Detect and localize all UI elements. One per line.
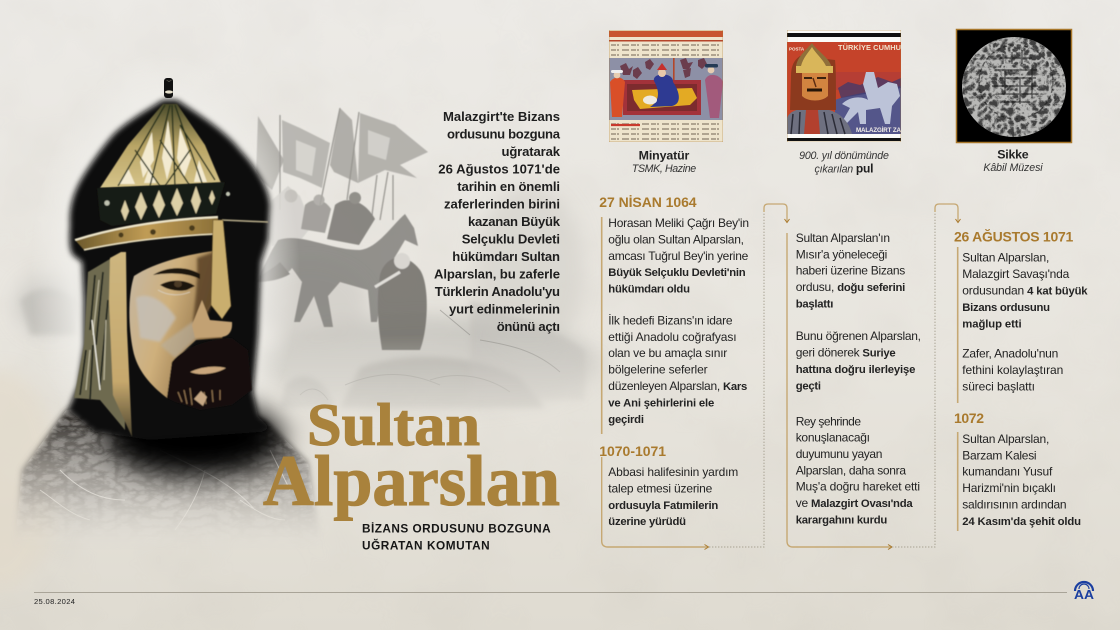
- dark helmet and hair silhouette: [68, 100, 270, 440]
- caption: coin: Sikke: [997, 148, 1029, 162]
- scene: riders and horse: [256, 186, 427, 350]
- neck shadow: [107, 400, 283, 476]
- caption: coin: Kâbil Müzesi: [983, 162, 1043, 174]
- text: 1072 events: Barzam Kalesi: [962, 448, 1037, 462]
- timeline column 2: hattına doğru ilerleyişe: [796, 364, 915, 376]
- title: Sultan: [307, 392, 480, 458]
- text: 1064 events: olan ve bu amaçla sınır: [608, 346, 727, 360]
- text: 1072 events: 24 Kasım'da şehit oldu: [962, 516, 1081, 528]
- text: 1070-1071 events: talep etmesi üzerine: [608, 481, 713, 495]
- portrait halo: [30, 50, 300, 490]
- helmet gold dome: [100, 104, 221, 188]
- timeline connectors: [602, 204, 960, 550]
- text: 1064 events: İlk hedefi Bizans'ın idare: [608, 313, 733, 327]
- helmet finial: [164, 78, 173, 98]
- heading: 27 Nisan 1064: 27 NİSAN 1064: [599, 194, 697, 210]
- battle scene illustration: [15, 108, 600, 415]
- intro paragraph: Selçuklu Devleti: [462, 231, 560, 246]
- caption: stamp: 900. yıl dönümünde: [799, 150, 889, 162]
- text: battle of Malazgirt: Bizans ordusunu: [962, 302, 1050, 314]
- stamp: riders: [842, 72, 900, 124]
- intro paragraph: önünü açtı: [497, 319, 560, 334]
- caption: stamp: [799, 150, 889, 176]
- image captions: [632, 148, 1043, 176]
- timeline column 2: Mısır'a yöneleceği: [796, 247, 887, 261]
- timeline column 2: Bunu öğrenen Alparslan,: [796, 329, 921, 343]
- timeline column 2: Sultan Alparslan'ın: [796, 231, 890, 245]
- caption: miniature: Minyatür: [639, 148, 690, 162]
- caption: coin: [983, 148, 1043, 174]
- text: 1064 events: bölgelerine seferler: [608, 363, 708, 377]
- text: battle of Malazgirt: Malazgirt Savaşı'nda: [962, 267, 1070, 281]
- text: battle of Malazgirt: mağlup etti: [962, 318, 1022, 330]
- text: 1064 events: amcası Tuğrul Bey'in yerine: [608, 249, 749, 263]
- text: battle of Malazgirt: Sultan Alparslan,: [962, 251, 1049, 265]
- text: 1064 events: ettiği Anadolu coğrafyası: [608, 330, 737, 344]
- scene: fallen soldiers: [20, 288, 585, 408]
- text: 1072 events: saldırısının ardından: [962, 497, 1067, 511]
- timeline column 2: konuşlanacağı: [796, 431, 870, 445]
- timeline column 1: [599, 194, 749, 528]
- timeline column 2: karargahını kurdu: [796, 514, 887, 526]
- helmet gold band: [75, 217, 268, 250]
- timeline column 2: başlattı: [796, 298, 833, 310]
- text: 1064 events: hükümdarı oldu: [608, 283, 690, 295]
- caption: miniature: TSMK, Hazine: [632, 163, 696, 175]
- image: stamp: MALAZGİRT ZA: [856, 127, 902, 134]
- text: battle of Malazgirt: Zafer, Anadolu'nun: [962, 347, 1058, 361]
- eyebrow and eye: [153, 268, 200, 295]
- caption: miniature: [632, 148, 696, 175]
- text: battle of Malazgirt: süreci başlattı: [962, 379, 1035, 393]
- logo: AA: AA: [1074, 588, 1094, 602]
- timeline column 2: duyumunu yayan: [796, 447, 882, 461]
- subtitle: UĞRATAN KOMUTAN: [362, 538, 490, 552]
- timeline column 2: [796, 231, 921, 526]
- intro paragraph: ordusunu bozguna: [447, 127, 561, 142]
- text: 1070-1071 events: [608, 465, 738, 528]
- caption: stamp: çıkarılan pul: [814, 162, 874, 176]
- text: 1064 events: ve Ani şehirlerini ele: [608, 397, 714, 409]
- image: stamp: POSTA: [789, 46, 805, 52]
- text: 1072 events: [962, 432, 1081, 528]
- intro paragraph: [434, 109, 561, 334]
- timeline column 2: geri dönerek Suriye: [796, 345, 896, 359]
- image: stamp: [786, 30, 902, 142]
- text: battle of Malazgirt: [962, 251, 1088, 393]
- left cheek guard: [74, 252, 132, 437]
- text: 1064 events: Büyük Selçuklu Devleti'nin: [608, 267, 746, 279]
- heading: 1070-1071: 1070-1071: [599, 443, 666, 459]
- nose guard: [211, 220, 231, 319]
- timeline column 3: [954, 227, 1088, 528]
- chainmail shoulders: [16, 406, 317, 528]
- scene: banners: [256, 108, 428, 220]
- helmet diamond lattice: [97, 182, 230, 226]
- image: coin: [956, 30, 1072, 142]
- intro paragraph: yurt edinmelerinin: [449, 302, 560, 317]
- face: [129, 251, 252, 410]
- date: 25.08.2024: [34, 597, 75, 606]
- subtitle: BİZANS ORDUSUNU BOZGUNA: [362, 522, 551, 536]
- intro paragraph: tarihin en önemli: [457, 179, 560, 194]
- timeline column 2: Rey şehrinde: [796, 414, 861, 428]
- timeline column 2: geçti: [796, 380, 821, 392]
- text: 1072 events: Sultan Alparslan,: [962, 432, 1049, 446]
- timeline column 2: haberi üzerine Bizans: [796, 264, 905, 278]
- image: miniature: [608, 30, 724, 142]
- text: battle of Malazgirt: fethini kolaylaştıran: [962, 363, 1063, 377]
- text: 1070-1071 events: üzerine yürüdü: [608, 516, 686, 528]
- timeline column 2: Muş'a doğru hareket etti: [796, 480, 920, 494]
- text: 1072 events: kumandanı Yusuf: [962, 465, 1053, 479]
- image: stamp: TÜRKİYE CUMHU: [838, 43, 901, 52]
- portrait: Sultan Alparslan: [16, 78, 317, 528]
- intro paragraph: Alparslan, bu zaferle: [434, 266, 560, 281]
- text: 1064 events: geçirdi: [608, 414, 644, 426]
- scene: ground haze: [15, 185, 600, 415]
- intro paragraph: kazanan Büyük: [468, 214, 561, 229]
- text: 1064 events: [608, 216, 749, 426]
- text: battle of Malazgirt: ordusundan 4 kat büyük: [962, 283, 1088, 297]
- timeline column 2: ve Malazgirt Ovası'nda: [796, 496, 913, 510]
- intro paragraph: zaferlerinden birini: [444, 196, 560, 211]
- mustache and beard: [167, 338, 252, 410]
- heading: 1072: 1072: [954, 410, 984, 426]
- text: 1070-1071 events: ordusuyla Fatımilerin: [608, 500, 718, 512]
- title: [263, 392, 560, 521]
- intro paragraph: Malazgirt'te Bizans: [443, 109, 560, 124]
- timeline column 2: Alparslan, daha sonra: [796, 463, 906, 477]
- intro paragraph: 26 Ağustos 1071'de: [438, 162, 560, 177]
- text: 1072 events: Harizmi'nin bıçaklı: [962, 481, 1056, 495]
- text: 1070-1071 events: Abbasi halifesinin yardım: [608, 465, 738, 479]
- heading: 26 Ağustos 1071: 26 AĞUSTOS 1071: [954, 227, 1074, 244]
- text: 1064 events: oğlu olan Sultan Alparslan,: [608, 232, 744, 246]
- intro paragraph: hükümdarı Sultan: [452, 249, 560, 264]
- stamp: armored warrior: [787, 43, 852, 134]
- title: Alparslan: [263, 441, 560, 521]
- intro paragraph: Türklerin Anadolu'yu: [435, 284, 560, 299]
- timeline column 2: ordusu, doğu seferini: [796, 280, 905, 294]
- text: 1064 events: düzenleyen Alparslan, Kars: [608, 379, 747, 393]
- intro paragraph: uğratarak: [502, 144, 561, 159]
- subtitle: [362, 522, 551, 552]
- logo: AA: [1074, 582, 1094, 602]
- text: 1064 events: Horasan Meliki Çağrı Bey'in: [608, 216, 749, 230]
